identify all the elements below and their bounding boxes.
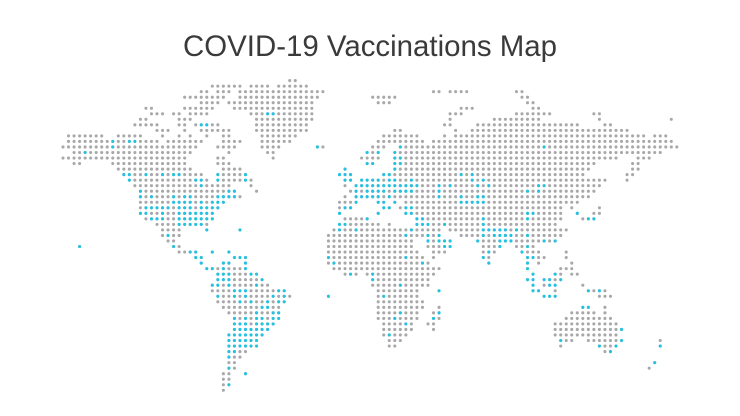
vaccinated dots (cyan) [80,114,661,385]
land dots (grey) [63,81,677,390]
title: COVID-19 Vaccinations Map [183,30,557,63]
dotted world map [63,81,677,390]
